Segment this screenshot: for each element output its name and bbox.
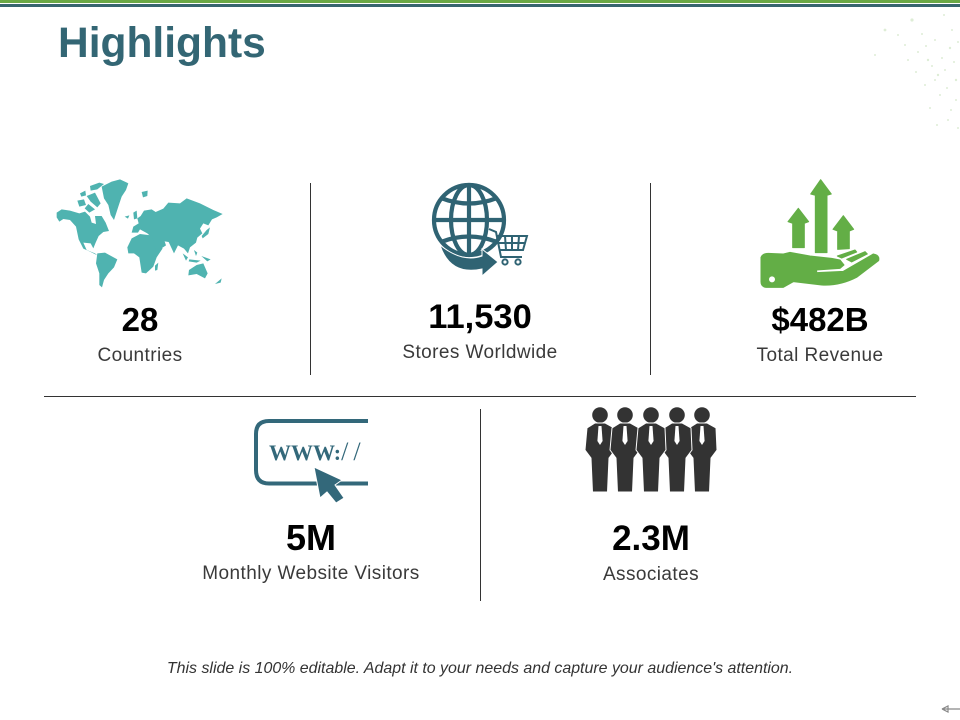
divider 2 <box>650 183 651 375</box>
stat: stores worldwide <box>402 298 558 363</box>
stat: total revenue: Total Revenue <box>757 345 883 366</box>
stat: monthly website visitors <box>202 517 420 584</box>
divider 1 <box>310 183 311 375</box>
stat: stores worldwide: 11,530 <box>428 298 532 336</box>
stat: associates: 2.3M <box>612 519 690 558</box>
stat: associates <box>603 519 699 585</box>
stat: countries: Countries <box>97 345 183 366</box>
title: Highlights <box>58 20 266 67</box>
stat: monthly website visitors: 5M <box>286 517 336 558</box>
stat: countries: 28 <box>122 301 158 338</box>
stat: associates: Associates <box>603 564 699 585</box>
stat: countries <box>97 301 183 366</box>
stat: total revenue <box>756 301 883 366</box>
stat: stores worldwide: Stores Worldwide <box>402 342 558 363</box>
horizontal divider <box>44 396 916 397</box>
stat: monthly website visitors: Monthly Website Visitors <box>202 563 420 584</box>
stat: total revenue: $482B <box>771 301 869 338</box>
footer note: This slide is 100% editable. Adapt it to your needs and capture your audience's attention. <box>167 660 793 677</box>
divider 3 <box>480 409 481 601</box>
top accent bars <box>0 0 960 7</box>
icon: www browser with cursor: WWW:// <box>269 437 366 466</box>
